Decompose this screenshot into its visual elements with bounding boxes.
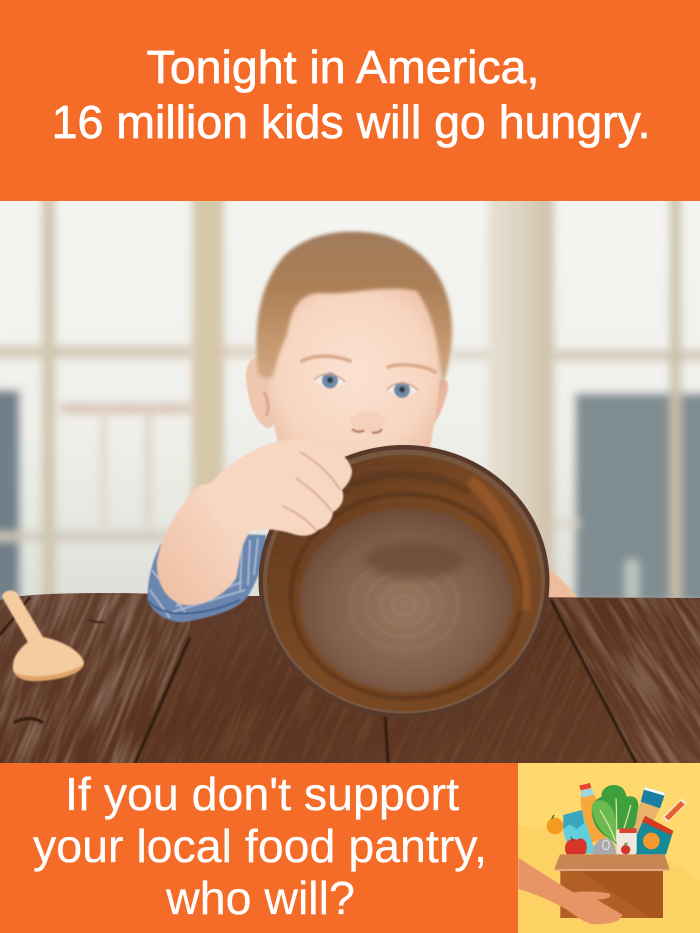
- wood grain: left plank: [0, 593, 190, 763]
- icon: helping hand and arm: [518, 858, 623, 924]
- icon: orange: [547, 815, 563, 834]
- left ear: [246, 357, 277, 428]
- sleeve: [148, 534, 266, 622]
- table: [0, 593, 700, 763]
- title line 1: Tonight in America,: [147, 41, 539, 93]
- child: [246, 232, 452, 462]
- icon: lettuce: [592, 785, 638, 844]
- icon: apple: [565, 837, 587, 854]
- bowl rim: [258, 445, 550, 718]
- wood knots: [15, 620, 104, 722]
- wood grain: middle plank: [135, 600, 636, 763]
- eyebrows: [302, 356, 435, 372]
- icon: glass jar with tomato: [617, 828, 637, 854]
- photo: hungry child holding an empty bowl: [0, 201, 700, 763]
- empty wooden bowl: [258, 445, 550, 720]
- icon: tin can: [636, 816, 673, 854]
- hair: [256, 232, 452, 392]
- finger creases: [282, 452, 340, 530]
- arm: [157, 480, 250, 605]
- call to action line 1: If you don't support: [65, 768, 459, 820]
- window backdrop: [0, 201, 700, 621]
- hand gripping bowl rim: [205, 439, 352, 536]
- title line 2: 16 million kids will go hungry.: [52, 96, 650, 148]
- call to action line 3: who will?: [166, 872, 355, 924]
- icon: canned lid: [593, 838, 616, 854]
- face: [268, 284, 440, 462]
- arm and sleeve: [148, 480, 266, 622]
- wood grain: right plank: [551, 598, 700, 763]
- nose: [350, 411, 386, 434]
- bowl dark patch: [365, 542, 465, 578]
- wooden spoon: [2, 590, 84, 681]
- blurred window background: [0, 190, 700, 611]
- bowl wall: [267, 455, 541, 711]
- icon: juice bottle: [579, 783, 607, 842]
- right eye: [387, 382, 418, 398]
- icon: cardboard box: [554, 854, 670, 918]
- icon: pasta jar: [633, 787, 665, 838]
- top banner: [0, 0, 700, 201]
- left eye: [314, 372, 345, 388]
- bowl floor: [300, 508, 512, 692]
- icon: pasta packet: [662, 798, 687, 822]
- bottom banner: [0, 763, 518, 933]
- call to action line 2: your local food pantry,: [33, 820, 487, 872]
- bowl wall texture: [396, 456, 540, 594]
- far hand behind the bowl: [545, 568, 578, 600]
- plank gaps: [0, 597, 636, 763]
- icon: food donation box panel: [518, 763, 700, 933]
- bowl concentric marks: [350, 560, 458, 650]
- right ear: [434, 380, 448, 424]
- icon: milk carton: [563, 810, 596, 854]
